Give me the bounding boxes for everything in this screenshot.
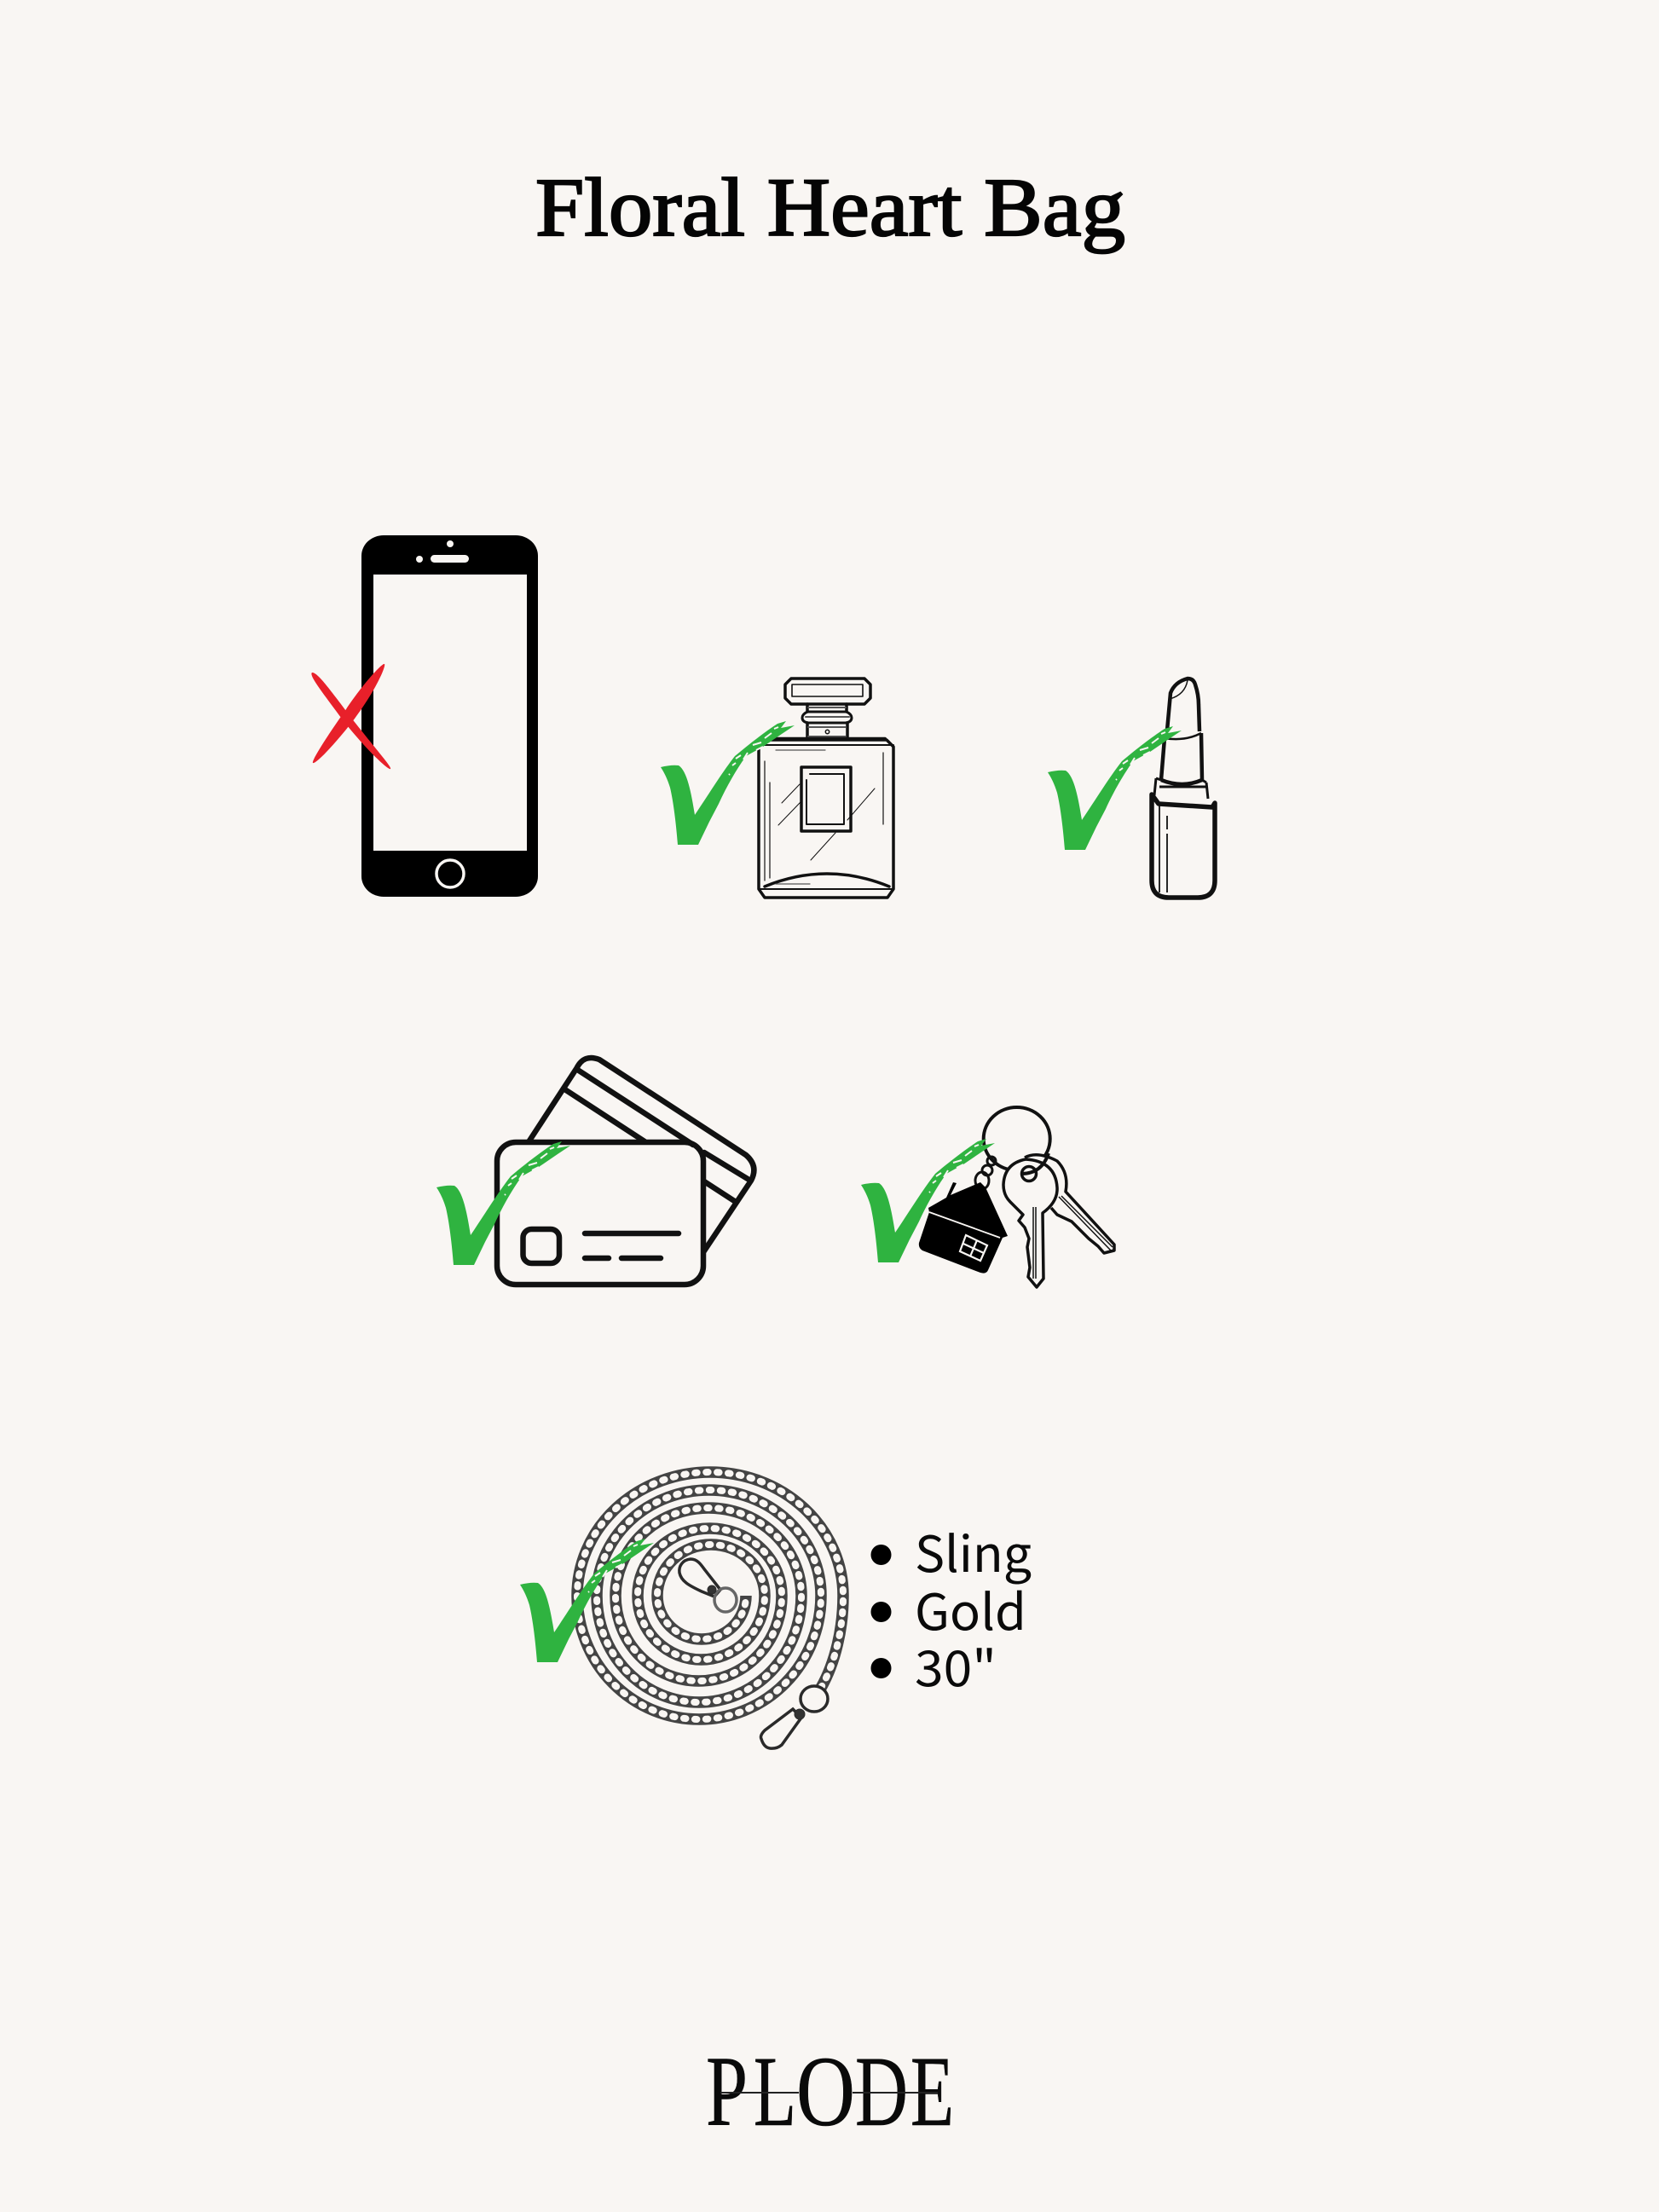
list: sling details xyxy=(871,1515,1032,1701)
tick: perfume xyxy=(661,721,795,845)
icon: credit cards xyxy=(497,1058,754,1285)
inner clasp xyxy=(679,1559,737,1612)
second key xyxy=(1025,1155,1114,1253)
icon: perfume bottle xyxy=(759,679,893,898)
bullet: length: 30" xyxy=(915,1629,997,1701)
icon: coiled chain sling xyxy=(577,1472,843,1748)
bullet: length xyxy=(871,1629,997,1701)
house tag xyxy=(919,1182,1008,1273)
icon: lipstick xyxy=(1152,679,1215,898)
logo: PLODE: D xyxy=(855,2036,908,2147)
title: Floral Heart Bag xyxy=(535,162,1125,253)
bullet: sling: Sling xyxy=(915,1515,1032,1586)
ring through key hole xyxy=(1021,1153,1049,1174)
front key xyxy=(1003,1159,1057,1287)
outer clasp xyxy=(760,1686,828,1748)
logo: PLODE: O xyxy=(796,2036,855,2147)
tick: chain xyxy=(520,1539,654,1662)
bullet: gold xyxy=(871,1573,1026,1644)
logo: PLODE: L xyxy=(754,2036,796,2147)
keychain links xyxy=(975,1157,996,1189)
icon: keys with house keychain xyxy=(919,1107,1114,1287)
icon: red cross over phone xyxy=(311,664,390,769)
logo: PLODE xyxy=(706,2036,954,2147)
logo: PLODE: E xyxy=(910,2036,954,2147)
bullet: gold: Gold xyxy=(915,1573,1026,1644)
tick: lipstick xyxy=(1048,726,1182,850)
tick: cards xyxy=(436,1141,570,1265)
tick: keys xyxy=(861,1139,995,1262)
logo: PLODE: P xyxy=(706,2036,748,2147)
icon: phone xyxy=(361,535,538,897)
